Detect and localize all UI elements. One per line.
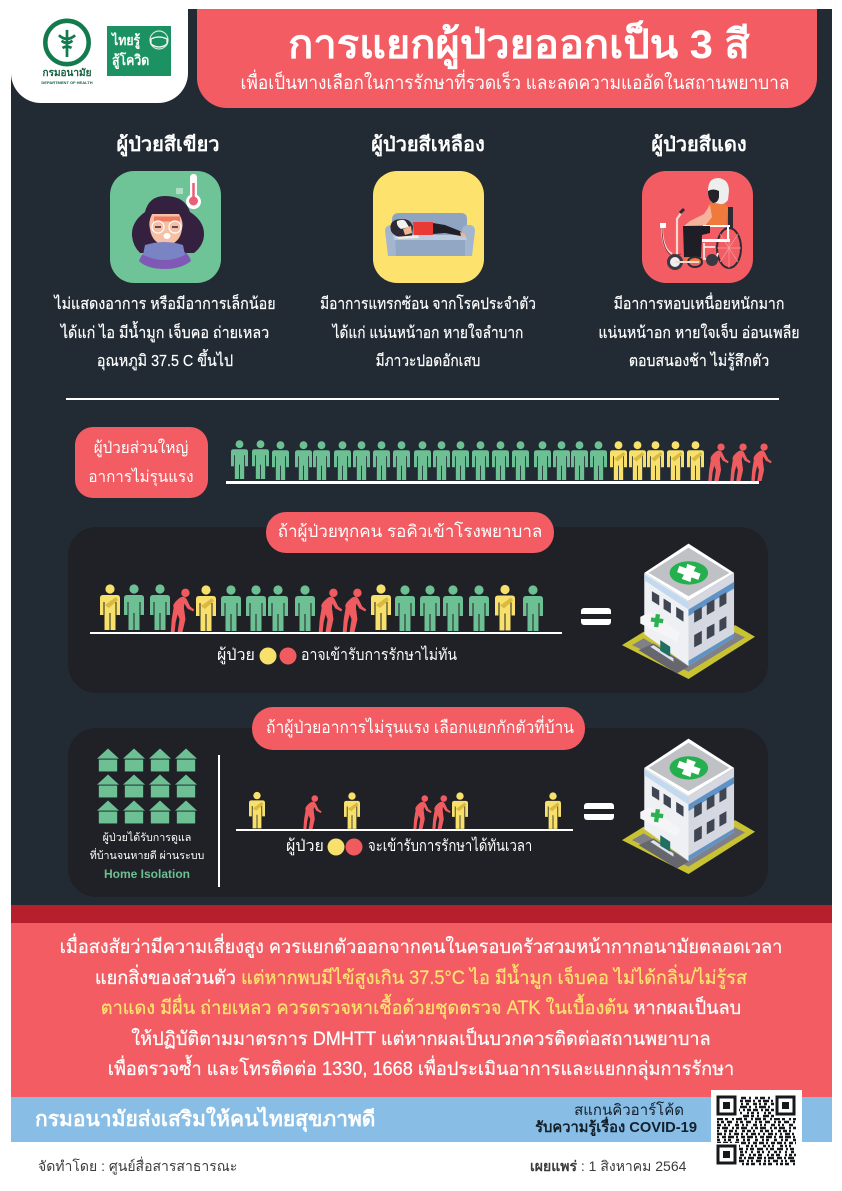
green patient description: อุณหภูมิ 37.5 C ขึ้นไป [97, 353, 233, 370]
icon: woman with fever [110, 171, 221, 283]
QR code [711, 1090, 802, 1166]
department name [41, 68, 93, 85]
heading: yellow patients: ผู้ป่วยสีเหลือง [371, 134, 485, 156]
pill heading: home isolation [252, 707, 585, 750]
campaign name [110, 32, 149, 69]
home isolation text: Home Isolation [104, 867, 190, 881]
legend dots: yellow and red [328, 838, 362, 856]
home isolation text: ผู้ป่วยได้รับการดูแล [103, 832, 191, 844]
home isolation text: ที่บ้านจนหายดี ผ่านระบบ [90, 850, 204, 862]
green patient description: ไม่แสดงอาการ หรือมีอาการเล็กน้อย [54, 296, 276, 313]
title banner [197, 9, 817, 108]
heading: green patients: ผู้ป่วยสีเขียว [116, 134, 220, 156]
department name: กรมอนามัย [43, 68, 91, 79]
main title: การแยกผู้ป่วยออกเป็น 3 สี [288, 23, 750, 67]
callout: most patients mild [75, 427, 208, 498]
red patient description [598, 292, 800, 370]
home isolation text [90, 831, 204, 881]
icon: hospital crowded [622, 544, 755, 679]
callout: most patients mild: อาการไม่รุนแรง [88, 469, 194, 486]
campaign name: ไทยรู้ [112, 32, 140, 48]
equals sign [581, 608, 611, 625]
red patient description: แน่นหน้าอก หายใจเจ็บ อ่อนเพลีย [598, 324, 800, 342]
icon: patient in wheelchair with oxygen [642, 171, 753, 283]
yellow patient description: ได้แก่ แน่นหน้าอก หายใจลำบาก [333, 324, 523, 342]
advice text [60, 933, 782, 1080]
campaign logo [107, 26, 171, 76]
pill heading: home isolation: ถ้าผู้ป่วยอาการไม่รุนแรง เลือกแยกกักตัวที่บ้าน [266, 718, 574, 737]
advice text: ให้ปฏิบัติตามมาตรการ DMHTT แต่หากผลเป็นบวกควรติดต่อสถานพยาบาล [131, 1028, 711, 1050]
caption label: patient (queue): ผู้ป่วย [217, 647, 255, 664]
panel: if everyone queues for hospital [68, 527, 768, 693]
caption: treated in time: จะเข้ารับการรักษาได้ทันเวลา [368, 838, 532, 855]
caption label: patient: ผู้ป่วย [286, 838, 324, 855]
icon: face mask [149, 30, 169, 50]
yellow patient description: มีอาการแทรกซ้อน จากโรคประจำตัว [320, 296, 536, 313]
dark red band [11, 905, 832, 923]
green patient description: ได้แก่ ไอ มีน้ำมูก เจ็บคอ ถ่ายเหลว [61, 324, 269, 342]
QR prompt line 2: รับความรู้เรื่อง COVID-19 [535, 1120, 697, 1136]
QR prompt line 1: สแกนคิวอาร์โค้ด [574, 1102, 684, 1119]
icon: person lying on sofa [373, 171, 484, 283]
callout: most patients mild: ผู้ป่วยส่วนใหญ่ [94, 440, 188, 457]
icon: department of health seal [43, 18, 91, 66]
advice text: แยกสิ่งของส่วนตัว แต่หากพบมีไข้สูงเกิน 37.5°C ไอ มีน้ำมูก เจ็บคอ ไม่ได้กลิ่น/ไม่รู้รส [95, 968, 747, 988]
advice text: ตาแดง มีผื่น ถ่ายเหลว ควรตรวจหาเชื้อด้วยชุดตรวจ ATK ในเบื้องต้น หากผลเป็นลบ [101, 998, 741, 1019]
yellow patient description [320, 294, 536, 370]
heading: red patients: ผู้ป่วยสีแดง [651, 134, 747, 156]
green patient description [53, 294, 276, 370]
caption: may not be treated in time: อาจเข้ารับการรักษาไม่ทัน [301, 647, 457, 664]
department name: DEPARTMENT OF HEALTH [41, 80, 93, 85]
publish date: เผยแพร่ : 1 สิงหาคม 2564 [530, 1158, 686, 1174]
red patient description: มีอาการหอบเหนื่อยหนักมาก [614, 296, 784, 313]
yellow patient description: มีภาวะปอดอักเสบ [376, 353, 480, 370]
slogan: กรมอนามัยส่งเสริมให้คนไทยสุขภาพดี [35, 1108, 375, 1131]
icon: hospital with capacity [622, 738, 755, 874]
blue footer band [11, 1097, 832, 1142]
pill heading: everyone queues: ถ้าผู้ป่วยทุกคน รอคิวเข้าโรงพยาบาล [278, 522, 542, 541]
subtitle: เพื่อเป็นทางเลือกในการรักษาที่รวดเร็ว และลดความแออัดในสถานพยาบาล [241, 73, 789, 94]
advice text: เมื่อสงสัยว่ามีความเสี่ยงสูง ควรแยกตัวออกจากคนในครอบครัวสวมหน้ากากอนามัยตลอดเวลา [60, 937, 782, 958]
equals sign [584, 803, 614, 820]
dark background panel [11, 9, 832, 905]
panel: mild patients isolate at home [68, 728, 768, 897]
pill heading: everyone queues [266, 512, 554, 553]
red patient description: ตอบสนองช้า ไม่รู้สึกตัว [629, 353, 769, 370]
legend dots: yellow and red [260, 648, 296, 664]
advice panel [11, 923, 832, 1097]
logos panel [11, 9, 188, 103]
advice text: เพื่อตรวจซ้ำ และโทรติดต่อ 1330, 1668 เพื่อประเมินอาการและแยกกลุ่มการรักษา [108, 1059, 734, 1080]
credit: จัดทำโดย : ศูนย์สื่อสารสาธารณะ [38, 1158, 237, 1174]
campaign name: สู้โควิด [112, 52, 149, 68]
